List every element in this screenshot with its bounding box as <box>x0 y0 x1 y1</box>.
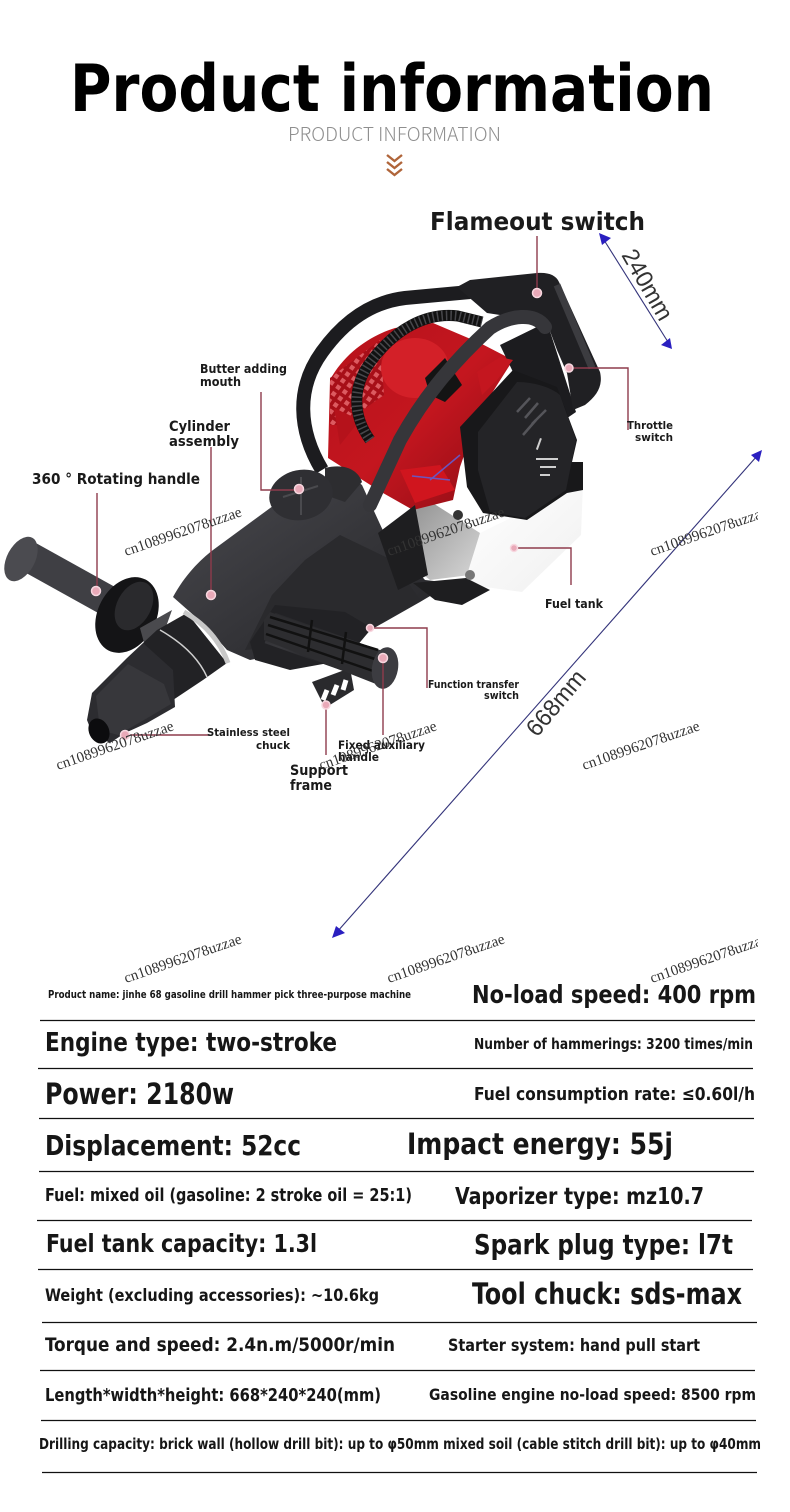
label: cylinder assembly: assembly <box>169 434 239 450</box>
label: function transfer switch: Function transfer <box>428 679 520 691</box>
callout: support frame <box>322 701 330 755</box>
main body housing <box>173 468 452 660</box>
subtitle: PRODUCT INFORMATION <box>288 120 501 147</box>
row: tank capacity and spark plug <box>46 1228 733 1261</box>
label: support frame: frame <box>290 778 332 794</box>
label: rotating handle: 360 ° Rotating handle <box>32 470 200 488</box>
row: fuel and vaporizer: Vaporizer type: mz10.7 <box>455 1184 704 1210</box>
label: function transfer switch: switch <box>484 690 519 702</box>
title: Product information <box>70 52 714 127</box>
row: weight and tool chuck: Tool chuck: sds-max <box>472 1277 742 1311</box>
row: weight and tool chuck: Weight (excluding accessories): ~10.6kg <box>45 1286 379 1306</box>
function switch and bracket <box>250 605 372 708</box>
row: power and fuel consumption: Fuel consumption rate: ≤0.60l/h <box>474 1084 755 1105</box>
product illustration: drill hammer <box>0 273 601 747</box>
watermarks: cn1089962078uzzae <box>122 504 244 560</box>
function dial <box>378 505 428 590</box>
watermarks: cn1089962078uzzae <box>580 718 702 774</box>
row: engine type and hammerings <box>45 1028 753 1058</box>
row: torque and starter: Torque and speed: 2.4n.m/5000r/min <box>45 1334 395 1356</box>
callout: cylinder <box>206 447 216 600</box>
row: tank capacity and spark plug: Fuel tank capacity: 1.3l <box>46 1229 317 1258</box>
watermarks <box>54 504 770 987</box>
row: engine type and hammerings: Number of hammerings: 3200 times/min <box>474 1035 753 1053</box>
label: fixed auxiliary handle <box>338 738 425 764</box>
dimension arrow: 668mm: 668mm <box>521 665 592 742</box>
row dividers <box>37 1020 757 1472</box>
icon: triple chevron <box>387 155 402 175</box>
callout: chuck <box>120 730 210 740</box>
corrugated hose <box>357 315 482 440</box>
callout: throttle <box>565 364 628 430</box>
label: support frame: Support <box>290 763 348 779</box>
label: stainless steel chuck <box>207 726 291 752</box>
watermarks: cn1089962078uzzae <box>648 931 770 987</box>
label: support frame <box>290 763 348 794</box>
callout: fuel tank <box>510 544 571 585</box>
engine red housing <box>328 323 513 510</box>
engine fuel tank and crankcase <box>405 483 583 605</box>
label: cylinder assembly <box>169 419 239 450</box>
specification table <box>37 980 761 1472</box>
row: dimensions and engine speed <box>45 1385 756 1406</box>
watermarks: cn1089962078uzzae <box>122 931 244 987</box>
label: fixed auxiliary handle: handle <box>338 750 379 764</box>
label: throttle switch: switch <box>635 431 673 444</box>
row: weight and tool chuck <box>45 1277 742 1311</box>
callout: auxiliary handle <box>378 654 388 735</box>
row: dimensions and engine speed: Length*width*height: 668*240*240(mm) <box>45 1385 381 1406</box>
row: power and fuel consumption: Power: 2180w <box>45 1077 234 1111</box>
label: stainless steel chuck: Stainless steel <box>207 726 290 739</box>
watermarks: cn1089962078uzzae <box>385 504 507 560</box>
label: throttle switch <box>627 419 673 444</box>
row: tank capacity and spark plug: Spark plug type: l7t <box>474 1228 733 1261</box>
rear side handle grip <box>0 531 172 664</box>
watermarks: cn1089962078uzzae <box>317 718 439 774</box>
dimension arrow: 240mm <box>599 233 678 349</box>
row: dimensions and engine speed: Gasoline engine no-load speed: 8500 rpm <box>429 1385 756 1404</box>
label: throttle switch: Throttle <box>627 419 673 432</box>
air filter cover <box>460 370 583 520</box>
label: fixed auxiliary handle: Fixed auxiliary <box>338 738 425 752</box>
row: torque and starter: Starter system: hand pull start <box>448 1336 700 1356</box>
row: displacement and impact energy <box>45 1127 673 1162</box>
chuck <box>84 612 228 747</box>
callout: function switch <box>366 624 427 688</box>
front loop handle <box>370 317 545 505</box>
dimension arrow: 240mm: 240mm <box>616 244 678 326</box>
fixed auxiliary handle <box>264 612 401 691</box>
black engine shroud behind handle <box>500 322 576 425</box>
watermarks: cn1089962078uzzae <box>54 718 176 774</box>
callout: rotating handle <box>92 493 100 596</box>
row: product name and no-load speed: Product name: jinhe 68 gasoline drill hammer pick three-purpose machine <box>48 988 411 1001</box>
label: cylinder assembly: Cylinder <box>169 419 230 435</box>
row: product name and no-load speed: No-load speed: 400 rpm <box>472 980 756 1009</box>
callout: butter <box>261 392 304 494</box>
red cover sliver <box>477 357 513 395</box>
label: butter adding mouth: Butter adding <box>200 362 287 376</box>
callout: flameout <box>532 236 542 298</box>
callout lines and markers <box>92 236 628 755</box>
oil filler cap <box>265 464 362 526</box>
row: product name and no-load speed <box>48 980 756 1009</box>
dimension arrow: 668mm <box>332 450 762 938</box>
row: fuel and vaporizer: Fuel: mixed oil (gasoline: 2 stroke oil = 25:1) <box>45 1185 412 1206</box>
row: torque and starter <box>45 1334 700 1356</box>
row: power and fuel consumption <box>45 1077 755 1111</box>
watermarks: cn1089962078uzzae <box>385 931 507 987</box>
rear loop handle and throttle grip <box>303 273 601 470</box>
label: butter adding mouth <box>200 362 287 389</box>
row: displacement and impact energy: Impact energy: 55j <box>407 1127 673 1161</box>
watermarks: cn1089962078uzzae <box>648 504 770 560</box>
label: flameout switch: Flameout switch <box>430 207 645 236</box>
row: engine type and hammerings: Engine type: two-stroke <box>45 1028 337 1058</box>
row: displacement and impact energy: Displacement: 52cc <box>45 1129 301 1162</box>
label: butter adding mouth: mouth <box>200 375 241 389</box>
label: function transfer switch <box>428 679 520 702</box>
label: fuel tank: Fuel tank <box>545 597 604 611</box>
label: stainless steel chuck: chuck <box>256 739 291 752</box>
row: fuel and vaporizer <box>45 1184 704 1210</box>
